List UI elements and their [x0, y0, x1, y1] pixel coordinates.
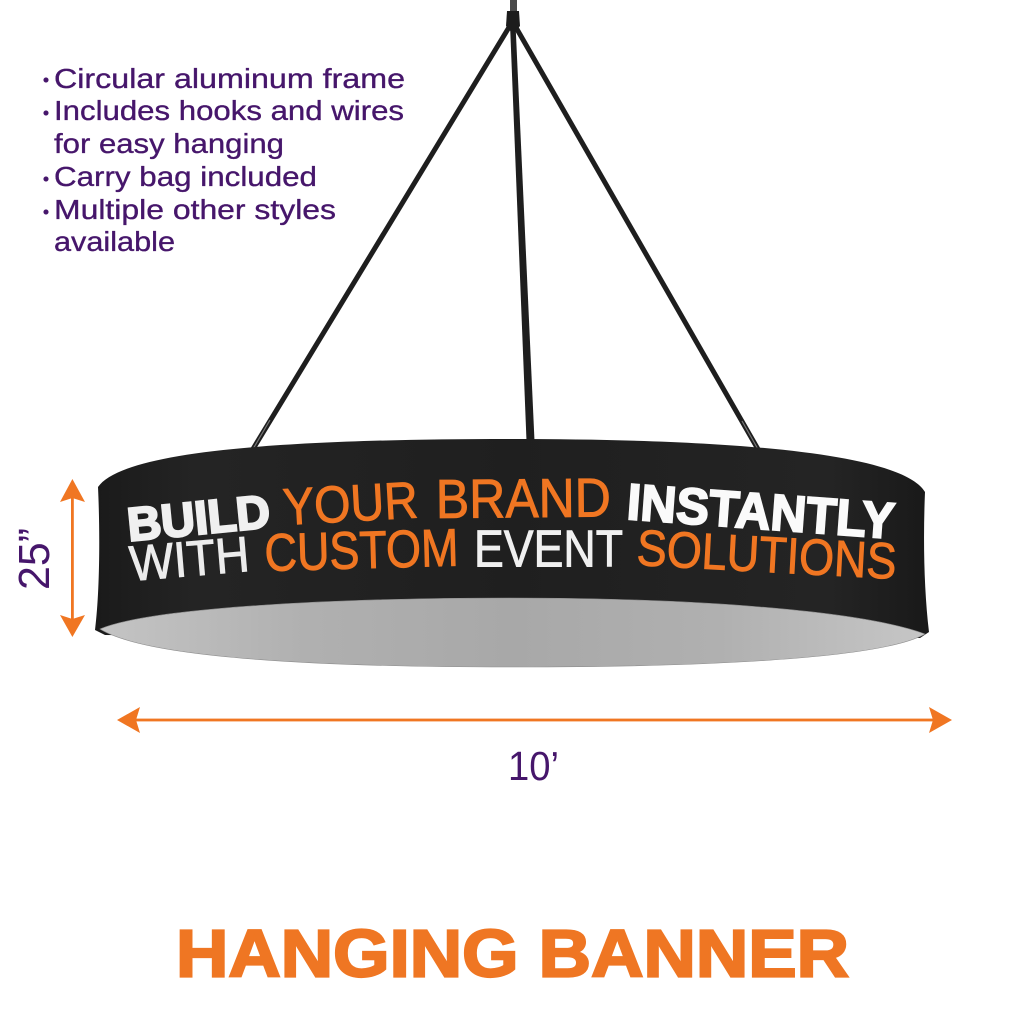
banner slogan line 2: WITH	[127, 526, 251, 592]
banner slogan line 2	[127, 519, 898, 592]
banner slogan line 1: BRAND	[436, 466, 611, 530]
feature bullet list: Carry bag included	[54, 161, 317, 192]
banner underside interior	[100, 598, 925, 667]
banner slogan line 1: YOUR	[281, 472, 419, 537]
height dimension arrow	[60, 479, 85, 637]
banner slogan line 2: CUSTOM	[264, 519, 459, 583]
feature bullet list: Circular aluminum frame	[54, 63, 405, 94]
feature bullet list: for easy hanging	[54, 128, 284, 159]
title: HANGING BANNER	[176, 916, 849, 992]
banner slogan line 1	[125, 466, 897, 551]
banner slogan line 2: SOLUTIONS	[635, 519, 898, 590]
banner slogan line 1: INSTANTLY	[625, 473, 897, 550]
width dimension arrow	[117, 707, 952, 733]
hanging wires and top connector	[253, 0, 759, 451]
banner slogan line 2: EVENT	[474, 520, 623, 578]
banner ring	[95, 439, 929, 667]
banner slogan line 1: BUILD	[125, 484, 272, 551]
feature bullet list: Multiple other styles	[54, 194, 336, 225]
banner outer black band	[95, 439, 929, 640]
width label: 10’	[508, 743, 559, 789]
feature bullet list: available	[54, 226, 175, 257]
height label: 25”	[10, 528, 59, 590]
feature bullet list: Includes hooks and wires	[54, 95, 404, 126]
feature bullet list	[44, 63, 405, 257]
